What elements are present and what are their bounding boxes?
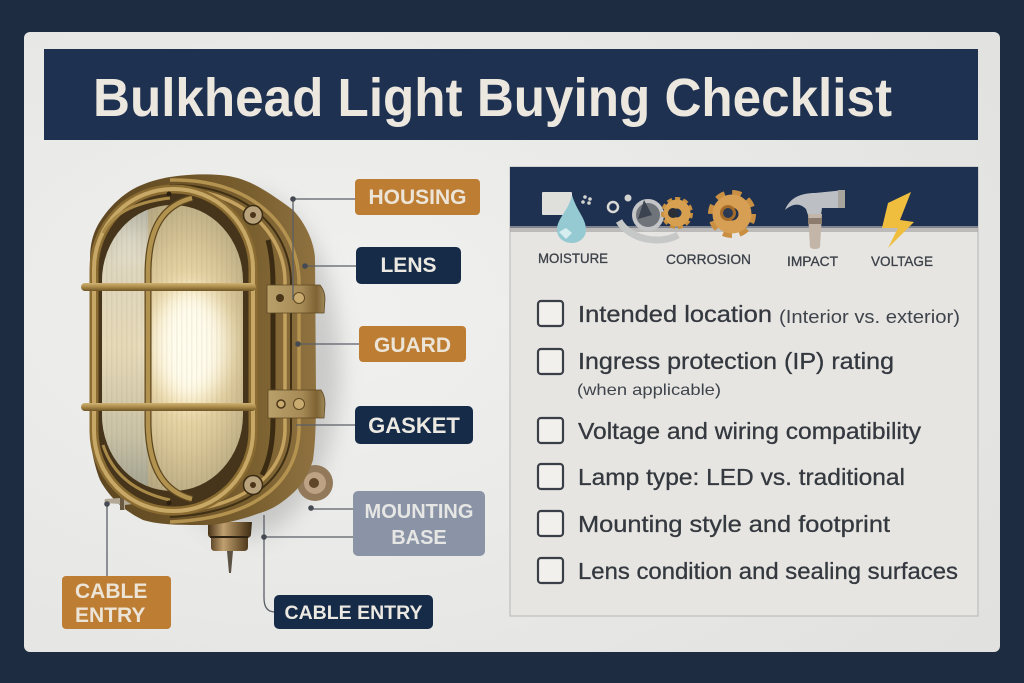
- side pin: [104, 493, 133, 510]
- cage bars: [103, 198, 192, 500]
- check item 2: (when applicable): [577, 382, 721, 399]
- title banner: [44, 49, 978, 140]
- callout: mounting base: MOUNTING: [365, 501, 473, 523]
- illustration: bulkhead light: [81, 174, 340, 573]
- icon: voltage: [882, 192, 914, 248]
- check item 5: Mounting style and footprint: [578, 511, 891, 537]
- callout: housing: HOUSING: [368, 186, 467, 209]
- check item 2: [538, 348, 894, 399]
- icon: gear: [711, 193, 753, 235]
- callout: cable entry right: [274, 595, 433, 629]
- housing: [90, 174, 316, 525]
- title: Bulkhead Light Buying Checklist: [93, 69, 892, 128]
- callout: guard: [295, 326, 466, 362]
- callout: housing: [290, 179, 480, 300]
- panel: checklist: [510, 167, 978, 616]
- callout: cable entry left: ENTRY: [75, 604, 145, 627]
- callout: guard: GUARD: [374, 334, 451, 357]
- callout: lens: LENS: [380, 254, 437, 277]
- check item 4: Lamp type: LED vs. traditional: [578, 464, 905, 490]
- callout: gasket: GASKET: [368, 413, 460, 438]
- lens: [102, 205, 243, 491]
- housing rings: [170, 180, 299, 522]
- label: voltage: VOLTAGE: [871, 253, 933, 269]
- label: impact: IMPACT: [787, 253, 838, 269]
- check item 1: (Interior vs. exterior): [779, 306, 960, 327]
- icon: moisture: [542, 192, 592, 243]
- callout: cable entry left: CABLE: [75, 580, 147, 603]
- front ring: [94, 189, 253, 511]
- lower clamp: [268, 390, 325, 418]
- callout: lens: [302, 247, 461, 284]
- callout: cable entry left: [62, 501, 171, 629]
- check item 1: Intended location: [578, 301, 772, 327]
- icon band: [510, 167, 978, 228]
- check item 3: Voltage and wiring compatibility: [578, 418, 922, 444]
- cable gland stub: [208, 522, 252, 573]
- callout: gasket: [296, 406, 473, 444]
- callout: mounting base: BASE: [391, 527, 447, 549]
- upper clamp: [267, 285, 325, 313]
- mounting ear: [297, 465, 333, 501]
- screws: [166, 192, 262, 506]
- icon: corrosion: [608, 194, 691, 240]
- icon: hammer: [785, 190, 845, 249]
- check item 6: Lens condition and sealing surfaces: [578, 558, 958, 584]
- label: corrosion: CORROSION: [666, 251, 751, 267]
- callout: mounting base: [261, 491, 485, 612]
- check item 1: [538, 301, 960, 327]
- label: moisture: MOISTURE: [538, 250, 608, 266]
- callout: cable entry right: CABLE ENTRY: [285, 602, 422, 624]
- check item 2: Ingress protection (IP) rating: [578, 348, 894, 374]
